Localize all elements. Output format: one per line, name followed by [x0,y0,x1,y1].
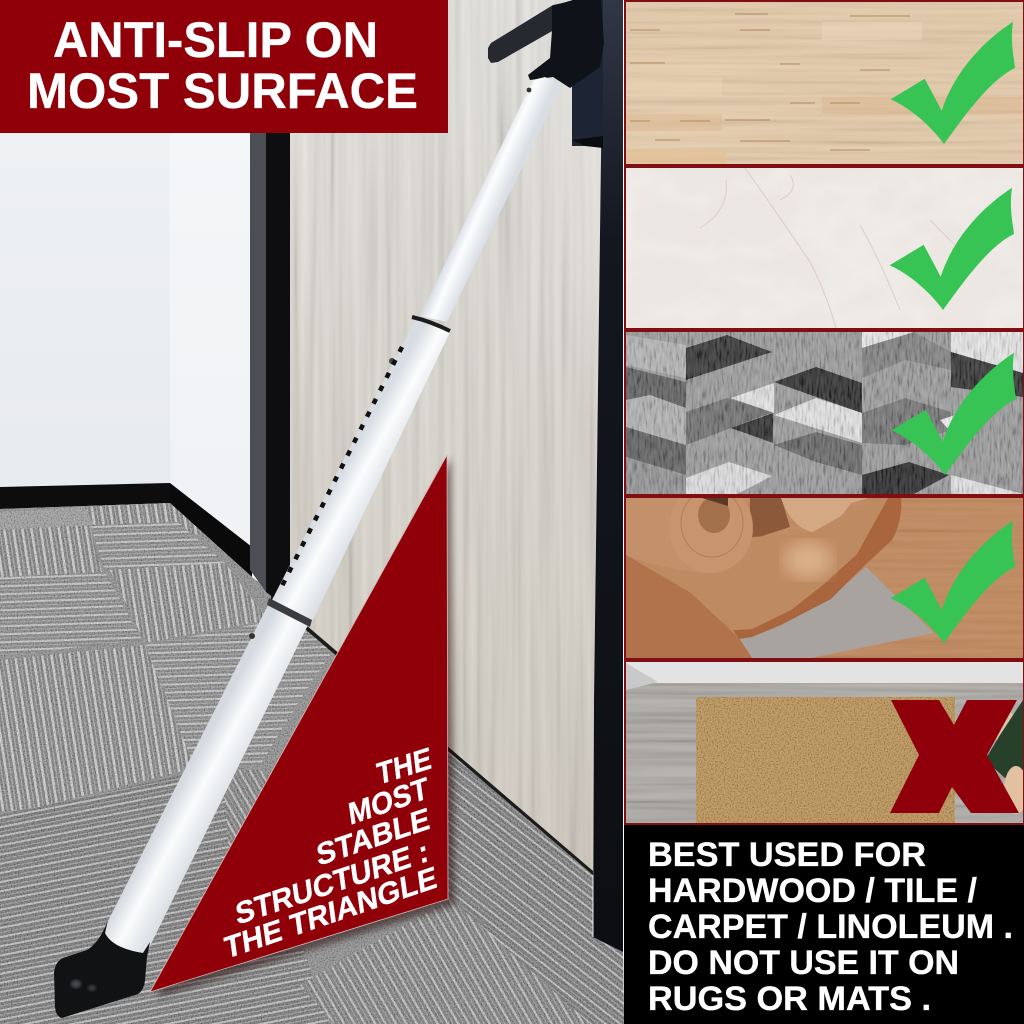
icon: check mark carpet [892,353,1016,475]
foreground floor [626,555,752,658]
wooden door panel [271,0,604,875]
usage note box: HARDWOOD / TILE / [648,872,978,910]
triangle callout [150,455,455,998]
roll body [626,505,695,570]
icon: check mark marble [890,188,1014,310]
icon: red X on doormat [890,700,1019,813]
white support pole [104,77,562,956]
triangle text: THE TRIANGLE [222,861,439,966]
background wall [0,0,252,600]
triangle text: STABLE [315,802,432,873]
panel: geometric carpet surface [626,332,1023,494]
triangle text: MOST [346,772,431,832]
usage note box [624,825,1024,1024]
panel: hardwood surface [626,2,1023,164]
door handle [488,0,604,148]
usage note box: RUGS OR MATS . [648,980,931,1018]
roll end [692,498,753,573]
headline banner: ANTI-SLIP ON [53,12,378,68]
door bottom edge [271,595,593,875]
icon: check mark hardwood [891,22,1015,144]
carpet floor [0,500,624,1024]
triangle text: STRUCTURE : [234,835,430,932]
usage note box: CARPET / LINOLEUM . [648,908,1013,946]
usage note box: DO NOT USE IT ON [648,944,959,982]
surface panels column border [624,0,1024,826]
left door frame [250,133,290,610]
sheet surface [752,499,888,627]
curled edge [733,497,901,639]
triangle text [222,742,439,966]
rear curl [750,497,790,540]
rubber foot [54,920,150,1018]
panel: doormat surface [626,662,1024,823]
underlay [739,567,934,658]
usage note box: BEST USED FOR [648,836,926,874]
panel: linoleum roll surface [626,483,1023,658]
icon: check mark linoleum [891,521,1015,643]
headline banner [0,0,448,133]
triangle text: THE [375,742,433,792]
panel: marble tile surface [626,168,1023,328]
headline banner: MOST SURFACE [27,63,418,119]
right door frame [593,0,623,952]
